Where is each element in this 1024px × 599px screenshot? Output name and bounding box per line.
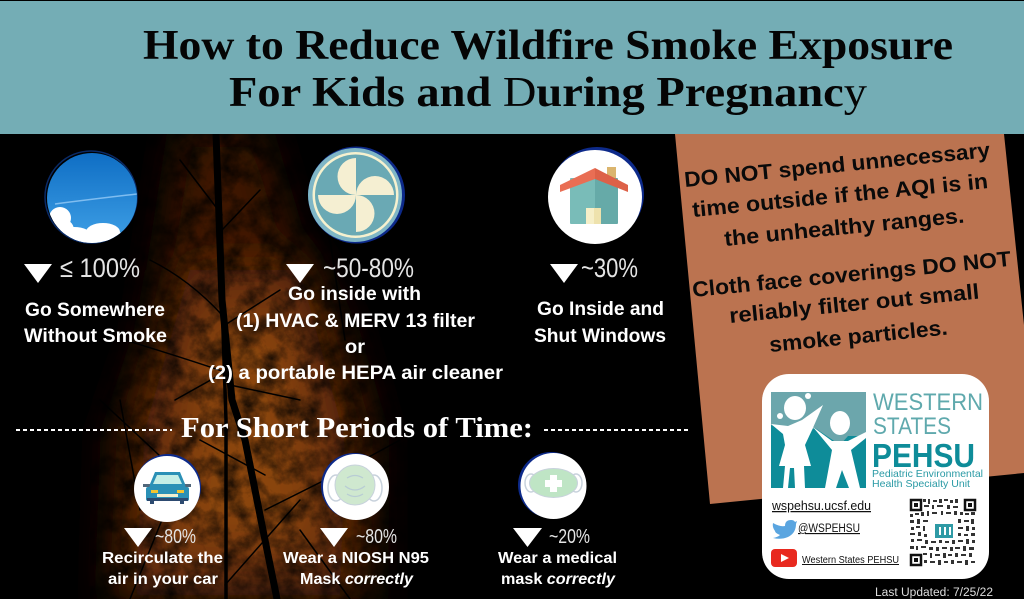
label: Without Smoke (24, 326, 167, 347)
label: Mask correctly (300, 571, 414, 588)
label: (1) HVAC & MERV 13 filter (236, 311, 476, 332)
link: website: wspehsu.ucsf.edu (771, 499, 871, 513)
label (283, 550, 429, 588)
label (208, 284, 504, 384)
card: Western States PEHSU contact (762, 374, 989, 579)
label (102, 550, 223, 588)
link: youtube: Western States PEHSU (802, 555, 899, 566)
logo: children (771, 392, 866, 488)
warning: cloth face coverings: reliably filter out small (728, 280, 980, 328)
QR code (910, 499, 975, 565)
title line one: How to Reduce Wildfire Smoke Exposure (143, 23, 953, 69)
reduction: up to 100 percent (24, 253, 140, 283)
logo: wordmark: Pediatric Environmental (872, 468, 983, 480)
icon: youtube (771, 549, 797, 567)
label: (2) a portable HEPA air cleaner (208, 363, 504, 384)
option: go somewhere without smoke (24, 151, 167, 347)
reduction: 30 percent: ~30% (581, 253, 638, 283)
icon: fan (308, 146, 405, 244)
label: Wear a NIOSH N95 (283, 550, 429, 567)
panel: warnings (675, 134, 1024, 504)
label: Go Inside and (537, 299, 664, 320)
label: air in your car (108, 571, 218, 588)
label: Shut Windows (534, 326, 666, 347)
reduction: 50 to 80 percent: ~50-80% (323, 253, 414, 283)
icon: medical mask (518, 452, 586, 519)
logo: wordmark: WESTERN (873, 389, 983, 416)
warning: cloth face coverings (691, 247, 1012, 357)
icon: house (548, 147, 644, 244)
link: twitter: @WSPEHSU (798, 523, 860, 535)
reduction: 80 percent (320, 526, 397, 548)
label: Go inside with (288, 284, 421, 305)
option: medical mask (498, 452, 617, 588)
icon: N95 mask (321, 453, 389, 520)
reduction: 50 to 80 percent (286, 253, 414, 283)
label (498, 550, 617, 588)
reduction: 20 percent: ~20% (549, 526, 590, 548)
option: N95 mask (283, 453, 429, 588)
logo: wordmark: STATES (873, 413, 951, 440)
warning: cloth face coverings: Cloth face coverings DO NOT (691, 247, 1012, 302)
label: Recirculate the (102, 550, 223, 567)
warning: outdoor time: the unhealthy ranges. (723, 204, 965, 251)
last updated note: Last Updated: 7/25/22 (875, 587, 993, 599)
reduction: 80 percent: ~80% (155, 526, 196, 548)
icon: car (134, 454, 201, 522)
label: or (345, 337, 366, 358)
option: recirculate car air (102, 454, 223, 588)
section heading: for short periods of time: For Short Periods of Time: (181, 412, 533, 444)
warning: outdoor time: DO NOT spend unnecessary (683, 138, 991, 192)
reduction: 80 percent: ~80% (356, 526, 397, 548)
logo: wordmark (872, 389, 983, 490)
warning: outdoor time: time outside if the AQI is in (691, 169, 989, 222)
label: Go Somewhere (25, 300, 165, 321)
label: Wear a medical (498, 550, 617, 567)
label: mask correctly (501, 571, 616, 588)
reduction: 30 percent (550, 253, 638, 283)
option: shut windows (534, 147, 666, 347)
option: filtered indoor air (208, 146, 504, 384)
warning: cloth face coverings: smoke particles. (768, 316, 949, 357)
logo: wordmark: PEHSU (872, 437, 975, 474)
title banner (0, 1, 1024, 134)
reduction: up to 100 percent: ≤ 100% (60, 253, 140, 283)
warning: outdoor time (683, 138, 991, 251)
label (534, 299, 666, 347)
icon: twitter bird (773, 520, 797, 539)
icon: blue sky (45, 151, 137, 253)
logo: wordmark: Health Specialty Unit (872, 478, 970, 490)
title line two: For Kids and During Pregnanc y (229, 70, 867, 116)
label (24, 300, 167, 347)
